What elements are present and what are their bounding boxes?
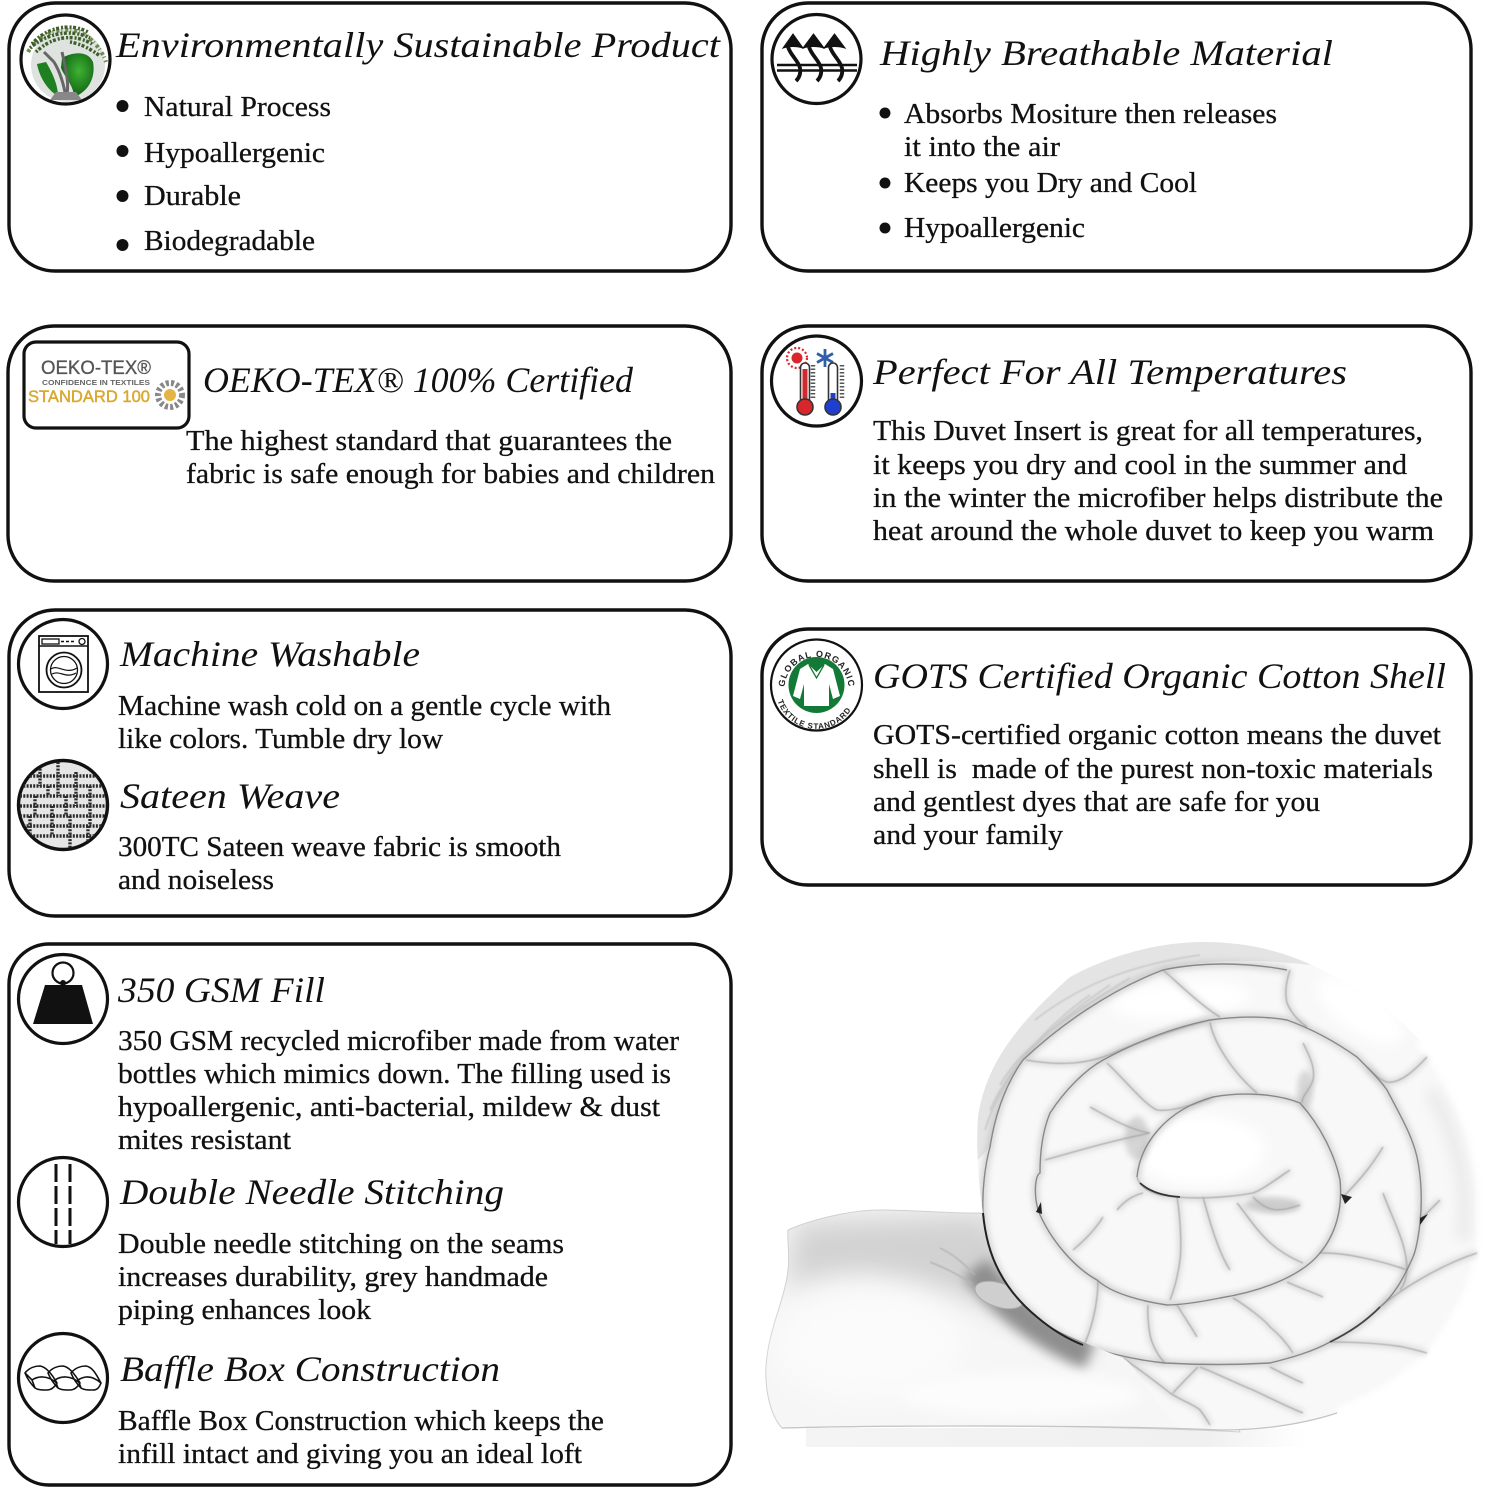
description: mites resistant [118, 1124, 291, 1156]
bullet list: Durable [144, 180, 241, 212]
icon: double needle stitching [18, 1158, 108, 1246]
icon: baffle box [18, 1334, 108, 1422]
description: fabric is safe enough for babies and children [186, 458, 716, 490]
description: and noiseless [118, 864, 274, 896]
panel: machine washable and sateen weave [9, 610, 731, 916]
icon: oeko-tex standard 100 label [24, 342, 189, 428]
description: and gentlest dyes that are safe for you [873, 786, 1320, 818]
icon: breathable arrows [772, 14, 861, 104]
icon: global organic textile standard [770, 638, 864, 732]
heading: Environmentally Sustainable Product [115, 25, 721, 65]
description [118, 1228, 564, 1326]
description: hypoallergenic, anti-bacterial, mildew & dust [118, 1091, 660, 1123]
icon: global organic textile standard: GLOBAL ORGANIC [778, 650, 854, 686]
description: 350 GSM recycled microfiber made from water [118, 1025, 679, 1057]
bullet list [116, 91, 331, 257]
icon: global organic textile standard: TEXTILE STANDARD [778, 698, 850, 729]
description: like colors. Tumble dry low [118, 723, 443, 755]
panel: environmentally sustainable product [9, 3, 731, 271]
panel: gots certified organic cotton shell [760, 627, 1473, 887]
description [186, 425, 716, 490]
description: and your family [873, 819, 1064, 851]
heading: GOTS Certified Organic Cotton Shell [873, 656, 1446, 696]
heading: Machine Washable [119, 634, 420, 674]
icon: weight [18, 954, 108, 1044]
heading: Baffle Box Construction [120, 1349, 500, 1389]
bullet list: Absorbs Mositure then releases [904, 98, 1277, 130]
panel: perfect for all temperatures [762, 326, 1471, 581]
heading: Perfect For All Temperatures [872, 352, 1347, 392]
panel: highly breathable material [762, 3, 1471, 271]
product image: rolled white duvet on pillow [766, 930, 1484, 1447]
heading: Double Needle Stitching [119, 1172, 504, 1212]
description: 300TC Sateen weave fabric is smooth [118, 831, 561, 863]
heading: Sateen Weave [120, 776, 340, 816]
description [118, 831, 561, 896]
icon: hot and cold thermometers [772, 336, 862, 426]
description: shell is made of the purest non-toxic materials [873, 753, 1433, 785]
description: bottles which mimics down. The filling used is [118, 1058, 671, 1090]
description: infill intact and giving you an ideal loft [118, 1438, 582, 1470]
description: This Duvet Insert is great for all temperatures, [873, 415, 1423, 447]
description: increases durability, grey handmade [118, 1261, 548, 1293]
description: it keeps you dry and cool in the summer and [873, 449, 1408, 481]
description: Double needle stitching on the seams [118, 1228, 564, 1260]
description: heat around the whole duvet to keep you warm [873, 515, 1434, 547]
panel: oeko-tex certified [8, 326, 731, 581]
heading: Highly Breathable Material [879, 33, 1333, 73]
description [118, 1405, 604, 1470]
description: in the winter the microfiber helps distribute the [873, 482, 1443, 514]
description [873, 719, 1441, 851]
description: Baffle Box Construction which keeps the [118, 1405, 604, 1437]
description: piping enhances look [118, 1294, 372, 1326]
description: GOTS-certified organic cotton means the duvet [873, 719, 1441, 751]
bullet list: Biodegradable [144, 225, 315, 257]
icon: sateen weave texture [18, 760, 108, 850]
bullet list: Natural Process [144, 91, 331, 123]
description: Machine wash cold on a gentle cycle with [118, 690, 611, 722]
description: The highest standard that guarantees the [186, 425, 672, 457]
bullet list [880, 98, 1277, 244]
bullet list: Keeps you Dry and Cool [904, 167, 1197, 199]
icon: green globe and tree [21, 15, 110, 104]
heading: 350 GSM Fill [117, 970, 325, 1010]
icon: oeko-tex standard 100 label: STANDARD 100 [28, 387, 150, 406]
icon: washing machine [18, 620, 108, 708]
icon: oeko-tex standard 100 label: CONFIDENCE IN TEXTILES [42, 378, 150, 387]
description [118, 1025, 679, 1156]
icon: oeko-tex standard 100 label: OEKO-TEX® [41, 358, 151, 379]
description [873, 415, 1443, 547]
bullet list: Hypoallergenic [144, 137, 325, 169]
heading: OEKO-TEX® 100% Certified [203, 360, 634, 400]
bullet list: it into the air [904, 131, 1060, 163]
panel: fill, stitching and baffle box [9, 944, 731, 1485]
description [118, 690, 611, 755]
bullet list: Hypoallergenic [904, 212, 1085, 244]
